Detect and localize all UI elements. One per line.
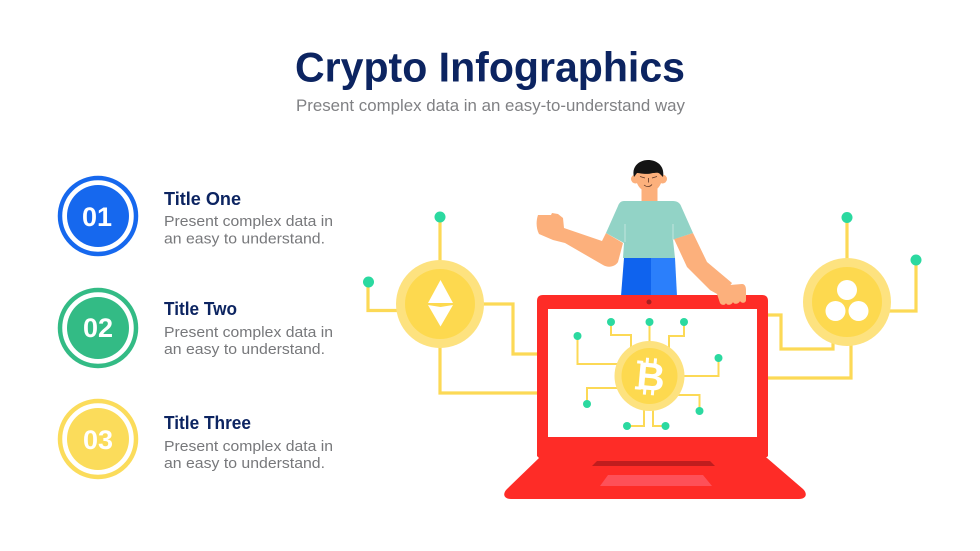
text three: an easy to understand. <box>164 456 325 472</box>
keyboard slot <box>592 461 715 466</box>
camera <box>646 300 652 304</box>
sleeve folds <box>625 224 673 242</box>
text two <box>164 325 333 358</box>
screen <box>548 309 757 437</box>
text one <box>164 214 333 248</box>
heading two: Title Two <box>164 299 237 319</box>
neck <box>642 186 658 204</box>
left nodes <box>363 212 446 288</box>
ethereum coin <box>396 260 484 348</box>
hair <box>633 160 663 177</box>
screen circuit <box>578 322 718 426</box>
item one <box>60 178 333 254</box>
item three <box>60 401 333 477</box>
text two: Present complex data in <box>164 325 333 341</box>
triad coin <box>803 258 891 346</box>
heading three: Title Three <box>164 413 251 433</box>
text three: Present complex data in <box>164 439 333 455</box>
person <box>537 160 732 296</box>
subtitle: Present complex data in an easy-to-understand way <box>296 97 686 115</box>
badge 03 <box>60 401 136 477</box>
badge 01: 01 <box>82 202 112 232</box>
head <box>636 170 662 192</box>
bitcoin coin: B <box>635 355 667 400</box>
screen nodes <box>574 318 722 430</box>
face <box>640 176 657 187</box>
trackpad <box>600 475 712 486</box>
text two: an easy to understand. <box>164 342 325 358</box>
left arm <box>537 213 623 267</box>
badge 03: 03 <box>83 425 113 455</box>
badge 02 <box>60 290 136 366</box>
circuit lines <box>368 222 916 393</box>
ears <box>631 174 667 184</box>
title: Crypto Infographics <box>295 44 685 90</box>
trousers <box>621 258 651 296</box>
heading one: Title One <box>164 189 241 209</box>
bitcoin coin <box>614 341 684 411</box>
item two <box>60 290 333 366</box>
text one: an easy to understand. <box>164 232 325 248</box>
text one: Present complex data in <box>164 214 333 230</box>
right arm <box>674 233 732 296</box>
laptop <box>504 295 806 499</box>
lid <box>537 295 768 460</box>
t-shirt <box>606 201 693 258</box>
hand <box>710 284 746 305</box>
right nodes <box>842 212 922 266</box>
base <box>504 458 806 499</box>
text three <box>164 439 333 472</box>
badge 01 <box>60 178 136 254</box>
badge 02: 02 <box>83 313 113 343</box>
